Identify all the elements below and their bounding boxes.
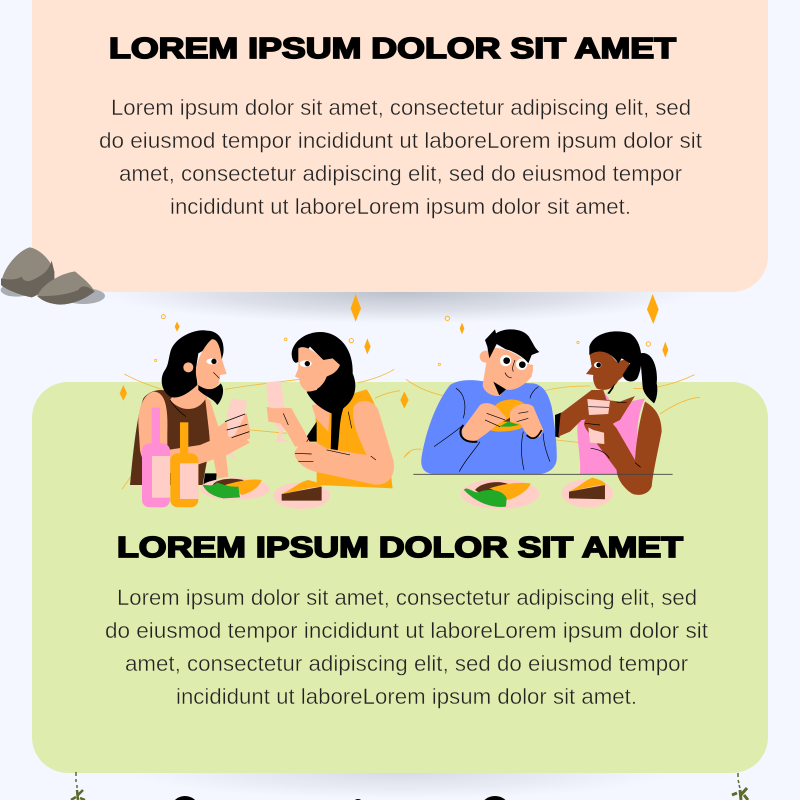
icon: rocks	[1, 247, 105, 305]
sparkles and decorative curves	[401, 294, 668, 408]
hair tops: bottom row figures	[172, 796, 509, 800]
text block: top panel: do eiusmod tempor incididunt ut laboreLorem ipsum dolor sit	[99, 128, 703, 153]
table line	[413, 473, 673, 476]
text block: top panel: Lorem ipsum dolor sit amet, consectetur adipiscing elit, sed	[111, 95, 691, 120]
plate with salad	[200, 478, 270, 500]
text block: bottom panel	[105, 585, 709, 709]
panel: peach	[32, 0, 768, 292]
woman two	[266, 332, 394, 488]
shadow: bottom panel	[130, 747, 670, 799]
heading: bottom panel: LOREM IPSUM DOLOR SIT AMET	[117, 532, 684, 564]
woman one	[130, 330, 250, 485]
man in blue sweater	[421, 329, 557, 474]
illustration: couple dining	[401, 294, 700, 509]
icon: plant right	[732, 773, 748, 800]
text block: top panel: amet, consectetur adipiscing elit, sed do eiusmod tempor	[119, 161, 683, 186]
illustration: women dining	[120, 294, 410, 509]
plate with salad	[461, 479, 539, 509]
text block: bottom panel: amet, consectetur adipiscing elit, sed do eiusmod tempor	[125, 651, 689, 676]
plate with pie	[273, 480, 330, 509]
sparkles and decorative curves	[120, 294, 409, 408]
plate with pie	[562, 478, 613, 508]
text block: bottom panel: Lorem ipsum dolor sit amet, consectetur adipiscing elit, sed	[117, 585, 697, 610]
woman in pink top	[555, 331, 662, 495]
icon: plant left	[71, 772, 85, 800]
text block: bottom panel: do eiusmod tempor incididunt ut laboreLorem ipsum dolor sit	[105, 618, 709, 643]
text block: top panel: incididunt ut laboreLorem ipsum dolor sit amet.	[170, 194, 631, 219]
text block: bottom panel: incididunt ut laboreLorem ipsum dolor sit amet.	[176, 684, 637, 709]
text block: top panel	[99, 95, 703, 219]
panel: green	[32, 382, 768, 773]
shadow: top panel	[100, 260, 700, 324]
bottles	[142, 408, 198, 507]
heading: top panel: LOREM IPSUM DOLOR SIT AMET	[109, 33, 677, 65]
